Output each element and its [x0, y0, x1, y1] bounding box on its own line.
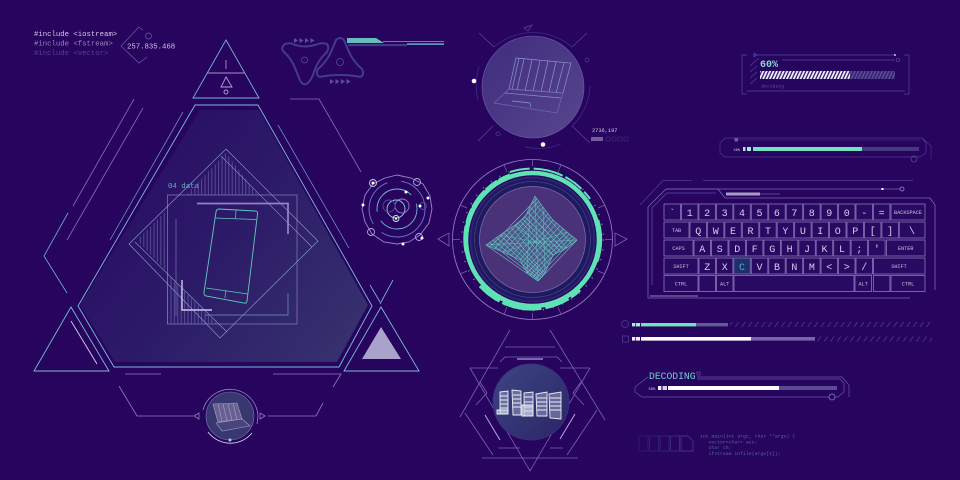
key legends: letters: 2	[704, 209, 710, 220]
key legends: letters: E	[730, 227, 736, 238]
key legends: letters: P	[852, 227, 858, 238]
key legends: modifiers: ENTER	[898, 246, 913, 252]
icon: small laptop	[213, 403, 250, 431]
key legends: letters: 0	[844, 209, 850, 220]
icon: large laptop	[494, 58, 571, 113]
readout: 2736,197: 2736,197	[592, 128, 617, 134]
progress widget: 60%	[742, 53, 909, 94]
key legends: modifiers: CTRL	[675, 282, 687, 288]
decoding panel: DECODING	[649, 371, 696, 382]
key legends: letters: '	[874, 244, 880, 256]
connector lines with small laptop	[119, 374, 341, 419]
key legends: letters: 5	[756, 209, 763, 220]
key legends: letters: H	[787, 245, 793, 256]
key legends: letters: Z	[704, 263, 710, 274]
key legends: letters: <	[826, 263, 832, 274]
key legends: letters: 9	[826, 209, 832, 220]
key legends: letters: O	[835, 227, 841, 238]
key legends: letters: -	[861, 209, 867, 220]
key legends: letters: B	[774, 263, 780, 274]
key legends: letters: S	[717, 245, 723, 256]
key legends: modifiers: SHIFT	[673, 264, 689, 270]
lower-right triangle	[344, 280, 419, 371]
teal header bars	[347, 38, 444, 46]
key legends: modifiers: ALT	[720, 282, 729, 288]
progress widget: 60%: decoding	[761, 84, 784, 90]
loading bar: white	[622, 336, 932, 342]
icon: server racks	[497, 390, 561, 419]
key legends: letters: L	[839, 245, 845, 256]
code snippet: main: char ch;	[708, 445, 732, 451]
lower-left triangle	[34, 307, 109, 371]
key legends: letters: M	[809, 263, 815, 274]
key legends: modifiers: SHIFT	[891, 264, 907, 270]
key legends: modifiers: CAPS	[672, 246, 685, 252]
key legends: letters: 4	[739, 209, 745, 220]
decoding panel	[635, 371, 849, 400]
code snippet: includes: #include <fstream>	[34, 40, 113, 48]
key legends: modifiers	[672, 210, 922, 288]
icon: smartphone	[204, 209, 258, 303]
code snippet: includes	[34, 31, 117, 58]
key legends: letters: C	[739, 263, 745, 274]
key legends: letters: T	[765, 227, 771, 238]
number badge: 257.835.468	[127, 44, 175, 52]
key legends: letters: F	[752, 245, 758, 256]
key legends: modifiers: BACKSPACE	[894, 210, 922, 216]
key legends: letters: =	[879, 209, 885, 220]
key legends: letters: 1	[687, 209, 693, 220]
key legends: modifiers: TAB	[672, 228, 681, 234]
orb side arrows	[438, 233, 627, 246]
key legends: letters: 3	[722, 209, 728, 220]
key legends: letters: V	[756, 263, 763, 274]
key legends: letters: N	[791, 263, 797, 274]
bracket line: right of main panel	[290, 99, 361, 172]
top triangle icon	[193, 40, 259, 98]
keyboard keys	[664, 204, 925, 292]
laptop orb	[472, 25, 590, 148]
key legends: letters: K	[821, 245, 828, 256]
key legends: letters: 7	[791, 209, 797, 220]
key legends: modifiers: CTRL	[902, 282, 914, 288]
key legends: letters: R	[747, 227, 754, 238]
key legends: letters: ]	[887, 226, 893, 238]
key legends: letters: 8	[809, 209, 815, 220]
decorative lines: left of main panel	[44, 99, 143, 293]
key legends: letters: [	[870, 226, 876, 238]
progress widget: 60%: 60%	[760, 60, 778, 71]
wireframe mesh	[486, 196, 577, 281]
key legends: letters: J	[804, 245, 810, 256]
keyboard frame	[640, 180, 935, 298]
progress widget: teal capsule bar	[720, 138, 931, 162]
chevron strip: lower	[330, 79, 350, 84]
decoding panel: 58%	[648, 388, 656, 392]
key legends: letters: G	[769, 245, 775, 256]
server hexagram orb	[460, 330, 605, 471]
key legends: letters: ;	[856, 245, 862, 256]
hatched diamond and frame	[129, 149, 318, 338]
small laptop orb	[203, 389, 258, 443]
file icons row	[639, 436, 693, 451]
orbit widget	[362, 175, 432, 246]
key legends: letters: U	[800, 227, 806, 238]
code snippet: includes: #include <vector>	[34, 50, 108, 58]
main triangle panel	[78, 105, 372, 367]
key legends: letters: 6	[774, 209, 780, 220]
central mesh orb	[452, 160, 612, 320]
teal ring	[462, 168, 604, 310]
code snippet: main: vector<char> acc;	[708, 440, 757, 446]
key legends: letters: \	[909, 226, 915, 238]
code snippet: main	[700, 434, 795, 457]
progress widget: teal capsule bar: 58%	[734, 149, 741, 153]
key legends: letters: /	[861, 262, 867, 274]
twin trefoil icons	[282, 38, 363, 84]
key legends: letters	[669, 207, 915, 274]
number badge	[121, 27, 175, 63]
key legends: letters: Q	[695, 227, 701, 238]
key legends: letters: I	[817, 227, 823, 238]
code snippet: main: ifstream infile(argv[1]);	[708, 451, 780, 457]
keyboard	[640, 180, 935, 298]
loading bar: teal	[622, 320, 932, 328]
readout: 2736,197	[592, 128, 628, 141]
key legends: letters: D	[734, 245, 740, 256]
key legends: letters: A	[699, 245, 705, 256]
key legends: letters: W	[713, 227, 719, 238]
code snippet: main: int main(int argc, char **argv) {	[700, 434, 795, 440]
data label: 04 data	[168, 183, 200, 191]
chevron strip: upper	[294, 38, 314, 43]
key legends: modifiers: ALT	[859, 282, 868, 288]
key legends: letters: X	[722, 263, 728, 274]
key legends: letters: `	[669, 207, 675, 220]
key legends: letters: Y	[782, 227, 788, 238]
code snippet: includes: #include <iostream>	[34, 31, 117, 39]
key legends: letters: >	[844, 263, 850, 274]
